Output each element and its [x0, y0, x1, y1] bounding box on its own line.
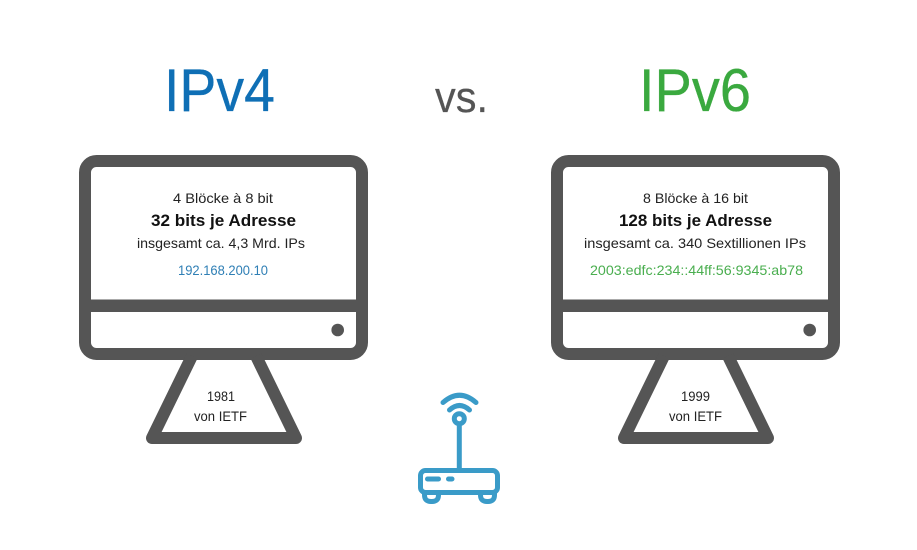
monitor stand — [624, 356, 768, 438]
text: total addresses: insgesamt ca. 4,3 Mrd. IPs — [137, 235, 305, 251]
router antenna head — [454, 414, 464, 424]
monitor frame — [557, 161, 834, 354]
icon: router — [420, 395, 498, 502]
text: author: von IETF — [194, 408, 247, 424]
monitor frame — [85, 161, 362, 354]
router antenna — [457, 424, 462, 470]
router outer wifi arc — [443, 395, 476, 402]
text: sample address: 192.168.200.10 — [178, 262, 268, 278]
router inner wifi arc — [450, 406, 470, 410]
text: author: von IETF — [669, 408, 722, 424]
text: year: 1981 — [207, 388, 235, 404]
text: sample address: 2003:edfc:234::44ff:56:9345:ab78 — [590, 262, 803, 278]
indicator dot — [803, 324, 816, 336]
monitor stand — [152, 356, 296, 438]
router status pills — [428, 476, 452, 482]
panel: IPv4 monitor — [85, 161, 362, 438]
monitor divider — [557, 300, 834, 312]
heading: IPv6: IPv6 — [639, 57, 751, 124]
router feet — [424, 493, 494, 502]
text: year: 1999 — [681, 388, 710, 404]
heading: vs.: vs. — [435, 73, 488, 122]
panel: IPv6 monitor — [557, 161, 834, 438]
text: total addresses: insgesamt ca. 340 Sextillionen IPs — [584, 235, 806, 251]
router body — [420, 470, 498, 492]
monitor divider — [85, 300, 362, 312]
indicator dot — [331, 324, 344, 336]
heading: IPv4: IPv4 — [164, 57, 275, 124]
text: blocks: 8 Blöcke à 16 bit — [643, 190, 748, 206]
text: bits per address: 32 bits je Adresse — [151, 211, 296, 230]
text: blocks: 4 Blöcke à 8 bit — [173, 190, 273, 206]
text: bits per address: 128 bits je Adresse — [619, 211, 772, 230]
